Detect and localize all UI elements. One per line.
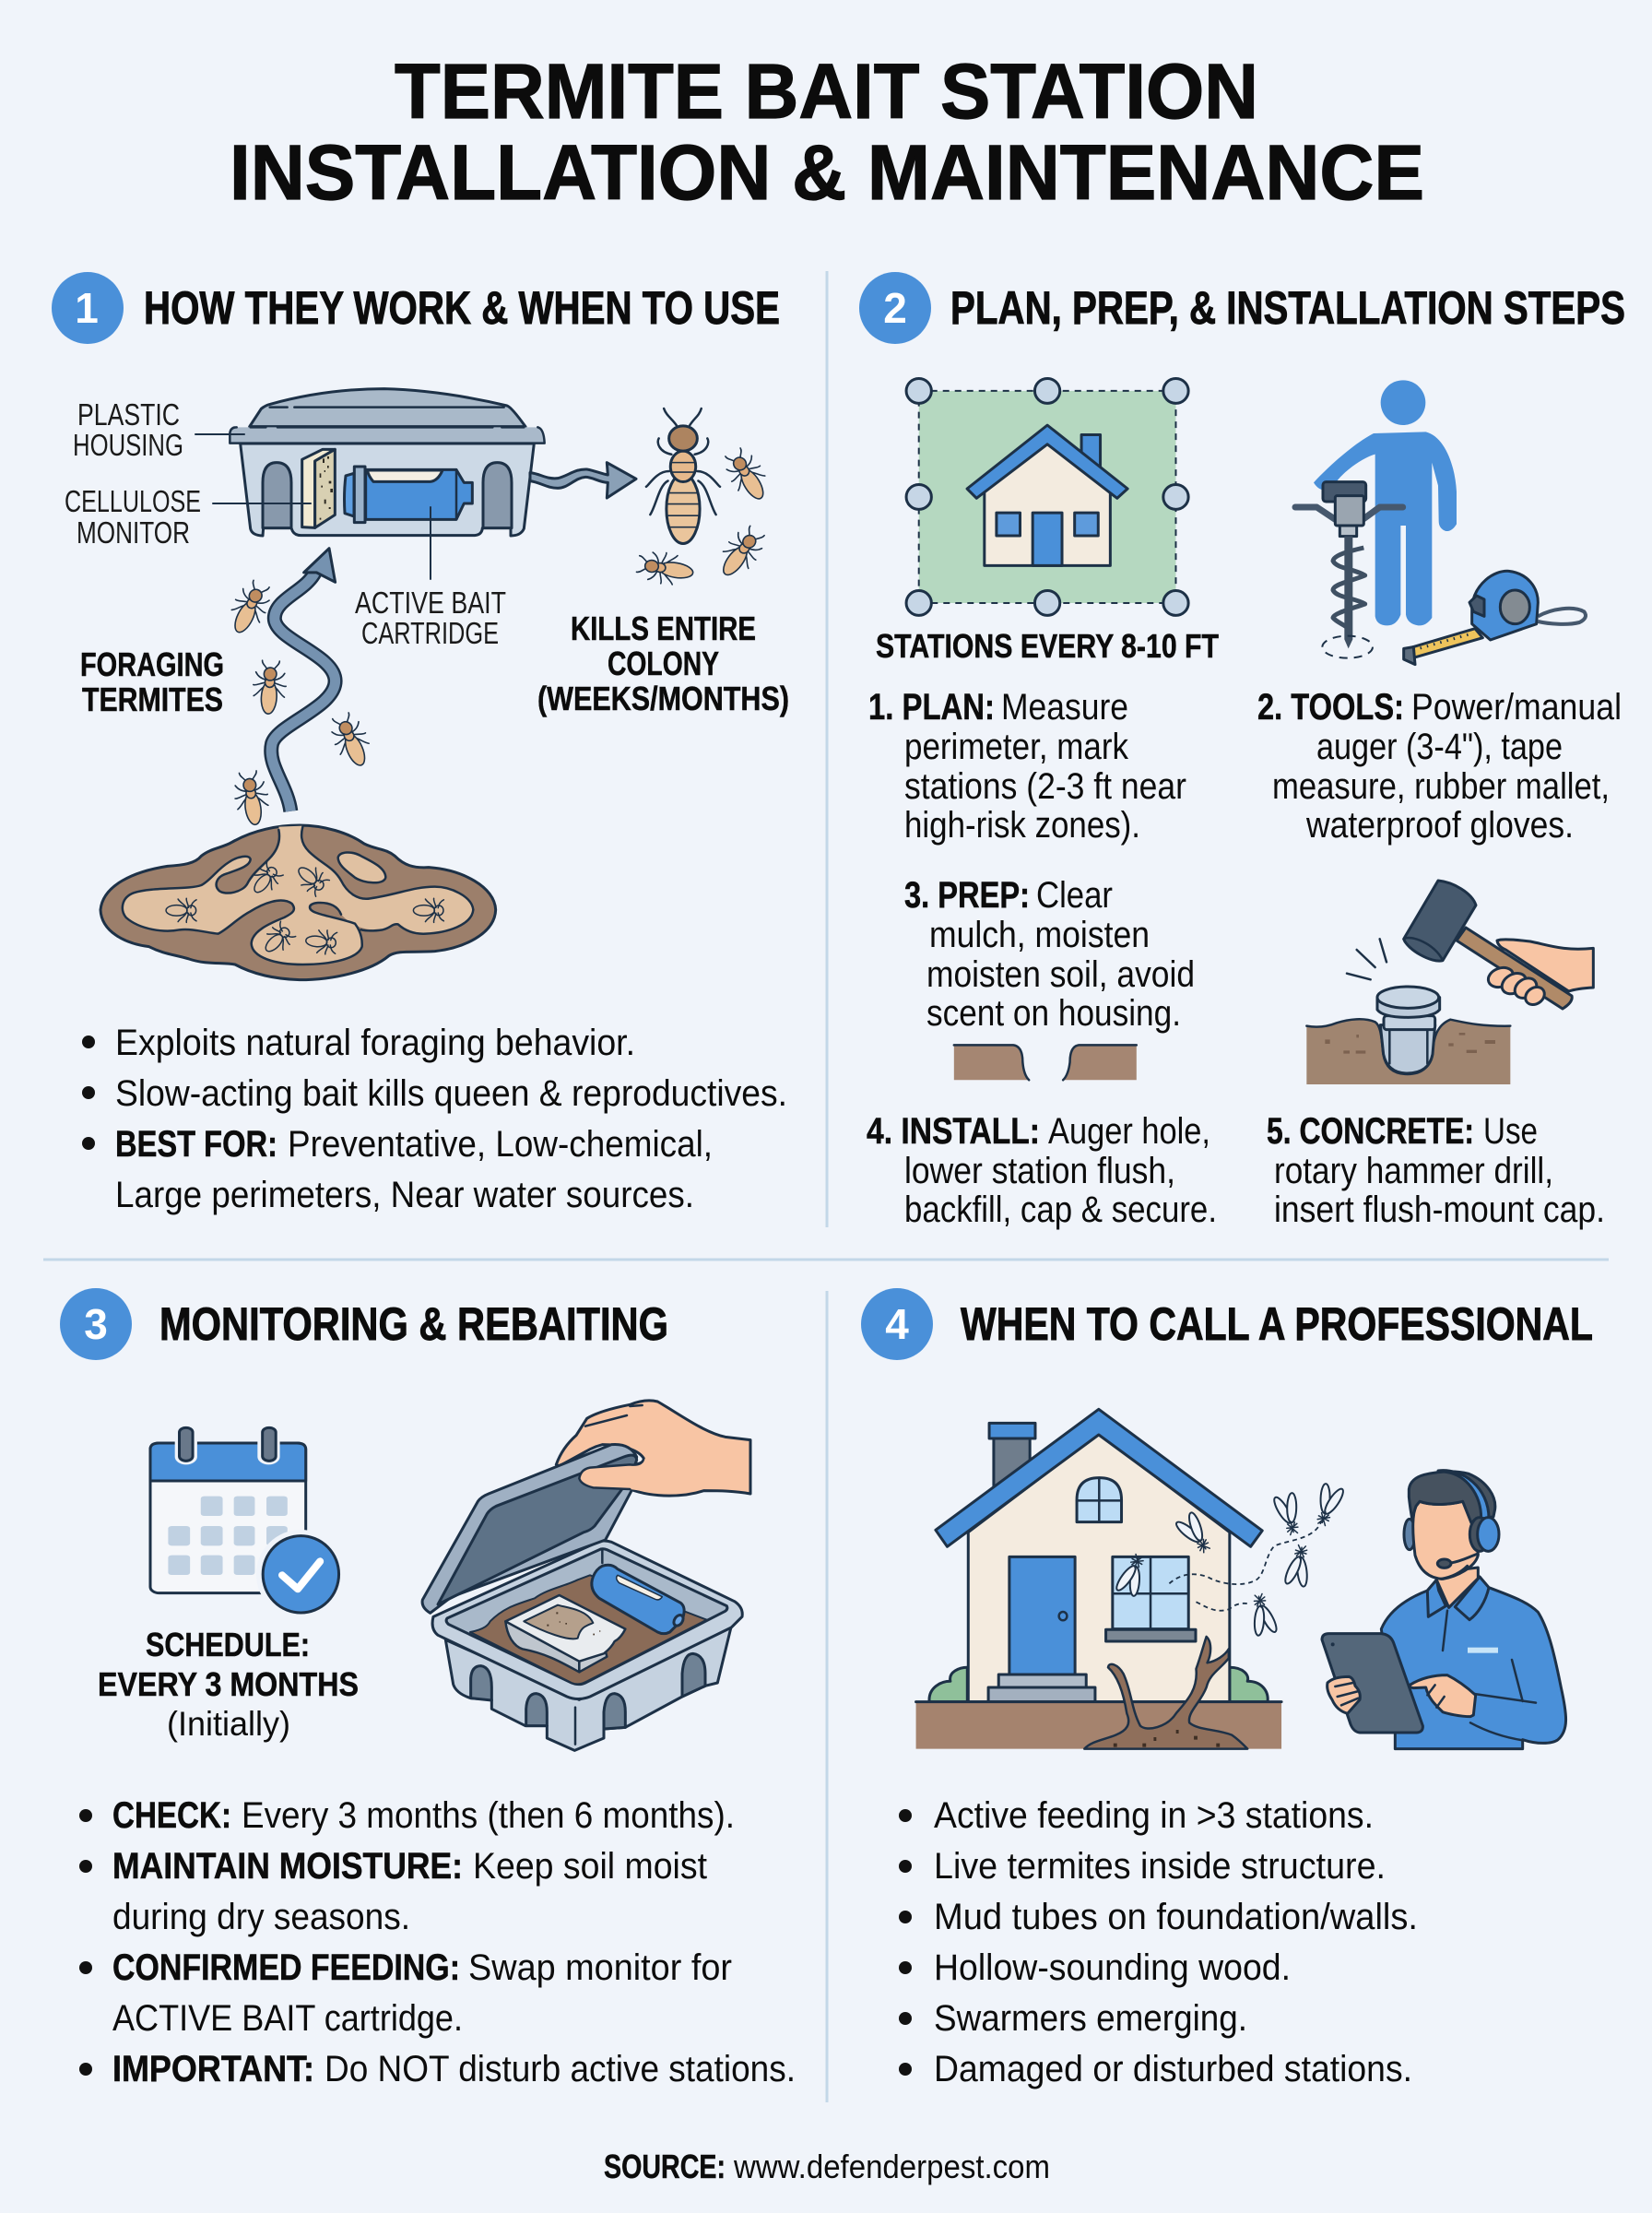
step 3 prep [904, 875, 1195, 1034]
icon: termite queen [646, 408, 720, 543]
diagram labels: MONITOR [77, 515, 190, 550]
diagram labels: ACTIVE BAIT [355, 586, 506, 620]
step 1 plan: perimeter, mark [904, 727, 1129, 767]
arrow: station to colony [530, 463, 636, 498]
step 2 tools: auger (3-4"), tape [1316, 727, 1563, 767]
illustrations: plan and prep [906, 379, 1188, 1080]
bullet list: how they work: Exploits natural foraging behavior. [115, 1023, 635, 1063]
bullet list: monitoring: Swap monitor for [468, 1947, 732, 1988]
number badge 1: 1 [75, 284, 99, 332]
step 1 plan: high-risk zones). [904, 805, 1140, 846]
step 1 plan: 1. PLAN: [868, 687, 995, 728]
leader lines [195, 434, 431, 579]
bullet list: monitoring: MAINTAIN MOISTURE: [112, 1846, 463, 1887]
bullet list: how they work [82, 1023, 787, 1215]
bullet list: monitoring: CONFIRMED FEEDING: [112, 1947, 460, 1988]
icon: flying swarmer termites [1113, 1481, 1347, 1638]
icon: termite workers [223, 444, 775, 827]
step 5 concrete: 5. CONCRETE: [1267, 1111, 1474, 1152]
title [230, 48, 1424, 216]
step 5 concrete: rotary hammer drill, [1274, 1151, 1553, 1191]
panel: monitoring and rebaiting [60, 1288, 796, 2089]
bullet list: how they work: Large perimeters, Near water sources. [115, 1175, 694, 1215]
step 2 tools: 2. TOOLS: [1257, 687, 1404, 728]
schedule label: SCHEDULE: [146, 1626, 310, 1663]
bullet list: how they work: BEST FOR: [115, 1124, 277, 1165]
bullet list: monitoring: Every 3 months (then 6 months). [242, 1795, 735, 1836]
number badge 2: 2 [883, 284, 907, 332]
diagram labels: PLASTIC [77, 397, 180, 432]
step 4 install: lower station flush, [904, 1151, 1175, 1191]
step 4 install: Auger hole, [1048, 1111, 1210, 1152]
label: stations spacing: STATIONS EVERY 8-10 FT [876, 627, 1219, 665]
flight paths of swarmers [1169, 1521, 1321, 1611]
diagram labels: TERMITES [82, 680, 223, 718]
bullet list: warning signs: Live termites inside structure. [934, 1846, 1386, 1887]
step 2 tools: waterproof gloves. [1305, 805, 1574, 846]
step 5 concrete [1267, 1111, 1605, 1230]
schedule label: (Initially) [167, 1705, 290, 1743]
diagram labels: HOUSING [73, 428, 183, 462]
number badge 1 [52, 272, 124, 344]
panel: how they work and when to use [52, 272, 789, 1215]
icon: bait station cutaway [230, 389, 545, 536]
panel: plan, prep and installation steps [859, 272, 1625, 1230]
icon: house plot with station markers [906, 379, 1188, 615]
icon: house with mud tubes [916, 1409, 1321, 1749]
step 1 plan [868, 687, 1186, 846]
step 1 plan: stations (2-3 ft near [904, 766, 1186, 807]
icon: calendar with check [150, 1426, 346, 1619]
number badge 2 [859, 272, 931, 344]
step 3 prep: Clear [1036, 875, 1113, 916]
bullet list: warning signs: Hollow-sounding wood. [934, 1947, 1291, 1988]
bullet list: monitoring: during dry seasons. [112, 1897, 410, 1937]
diagram labels: (WEEKS/MONTHS) [537, 680, 789, 717]
bullet list: monitoring: IMPORTANT: [112, 2049, 314, 2089]
source line [604, 2148, 1050, 2185]
bullet list: how they work: Slow-acting bait kills queen & reproductives. [115, 1073, 787, 1114]
icon: mallet tapping station [1306, 881, 1593, 1084]
bullet list: monitoring: Keep soil moist [473, 1846, 707, 1887]
panel: when to call a professional [861, 1288, 1593, 2089]
number badge 4: 4 [885, 1300, 909, 1348]
diagram labels: CELLULOSE [65, 484, 201, 518]
number badge 3 [60, 1288, 132, 1360]
diagram labels: CARTRIDGE [361, 616, 499, 650]
diagram: termites and foraging path [223, 408, 775, 827]
bullet list: monitoring [79, 1795, 796, 2089]
arrow: foraging path [271, 549, 336, 811]
diagram labels: KILLS ENTIRE [571, 609, 756, 647]
bullet list: warning signs: Damaged or disturbed stations. [934, 2049, 1412, 2089]
step 2 tools: Power/manual [1411, 687, 1622, 728]
schedule label: EVERY 3 MONTHS [98, 1665, 359, 1703]
schedule label [98, 1626, 359, 1743]
step 5 concrete: insert flush-mount cap. [1274, 1189, 1605, 1230]
step 3 prep: scent on housing. [926, 993, 1181, 1034]
heading 1: HOW THEY WORK & WHEN TO USE [144, 282, 780, 334]
step 4 install [867, 1111, 1217, 1230]
icon: open bait station with hand [422, 1401, 750, 1750]
bullet list: warning signs: Swarmers emerging. [934, 1998, 1247, 2039]
step 2 tools [1257, 687, 1622, 846]
diagram labels: COLONY [608, 645, 719, 682]
icon: underground nest [100, 825, 496, 980]
heading 3: MONITORING & REBAITING [159, 1298, 668, 1350]
step 3 prep: moisten soil, avoid [926, 954, 1195, 995]
title: INSTALLATION & MAINTENANCE [230, 129, 1424, 216]
bullet list: warning signs [899, 1795, 1418, 2089]
bullet list: monitoring: ACTIVE BAIT cartridge. [112, 1998, 463, 2039]
diagram labels: FORAGING [80, 645, 224, 683]
source line: www.defenderpest.com [733, 2148, 1050, 2185]
step 3 prep: 3. PREP: [904, 875, 1030, 916]
number badge 4 [861, 1288, 933, 1360]
step 1 plan: Measure [1001, 687, 1128, 728]
number badge 3: 3 [84, 1300, 108, 1348]
icon: soil for prep step [954, 1045, 1137, 1080]
bullet list: monitoring: Do NOT disturb active stations. [324, 2049, 796, 2089]
title: TERMITE BAIT STATION [395, 48, 1258, 135]
step 3 prep: mulch, moisten [929, 915, 1150, 955]
source line: SOURCE: [604, 2148, 726, 2185]
icon: technician with tablet [1322, 1471, 1566, 1749]
bullet list: warning signs: Mud tubes on foundation/walls. [934, 1897, 1418, 1937]
icon: person with auger and tape measure [1295, 380, 1586, 665]
bullet list: warning signs: Active feeding in >3 stations. [934, 1795, 1374, 1836]
bullet list: how they work: Preventative, Low-chemical, [288, 1124, 713, 1165]
diagram labels [65, 397, 789, 718]
step 5 concrete: Use [1483, 1111, 1538, 1152]
step 4 install: backfill, cap & secure. [904, 1189, 1217, 1230]
step 4 install: 4. INSTALL: [867, 1111, 1040, 1152]
step 2 tools: measure, rubber mallet, [1272, 766, 1610, 807]
bullet list: monitoring: CHECK: [112, 1795, 231, 1836]
